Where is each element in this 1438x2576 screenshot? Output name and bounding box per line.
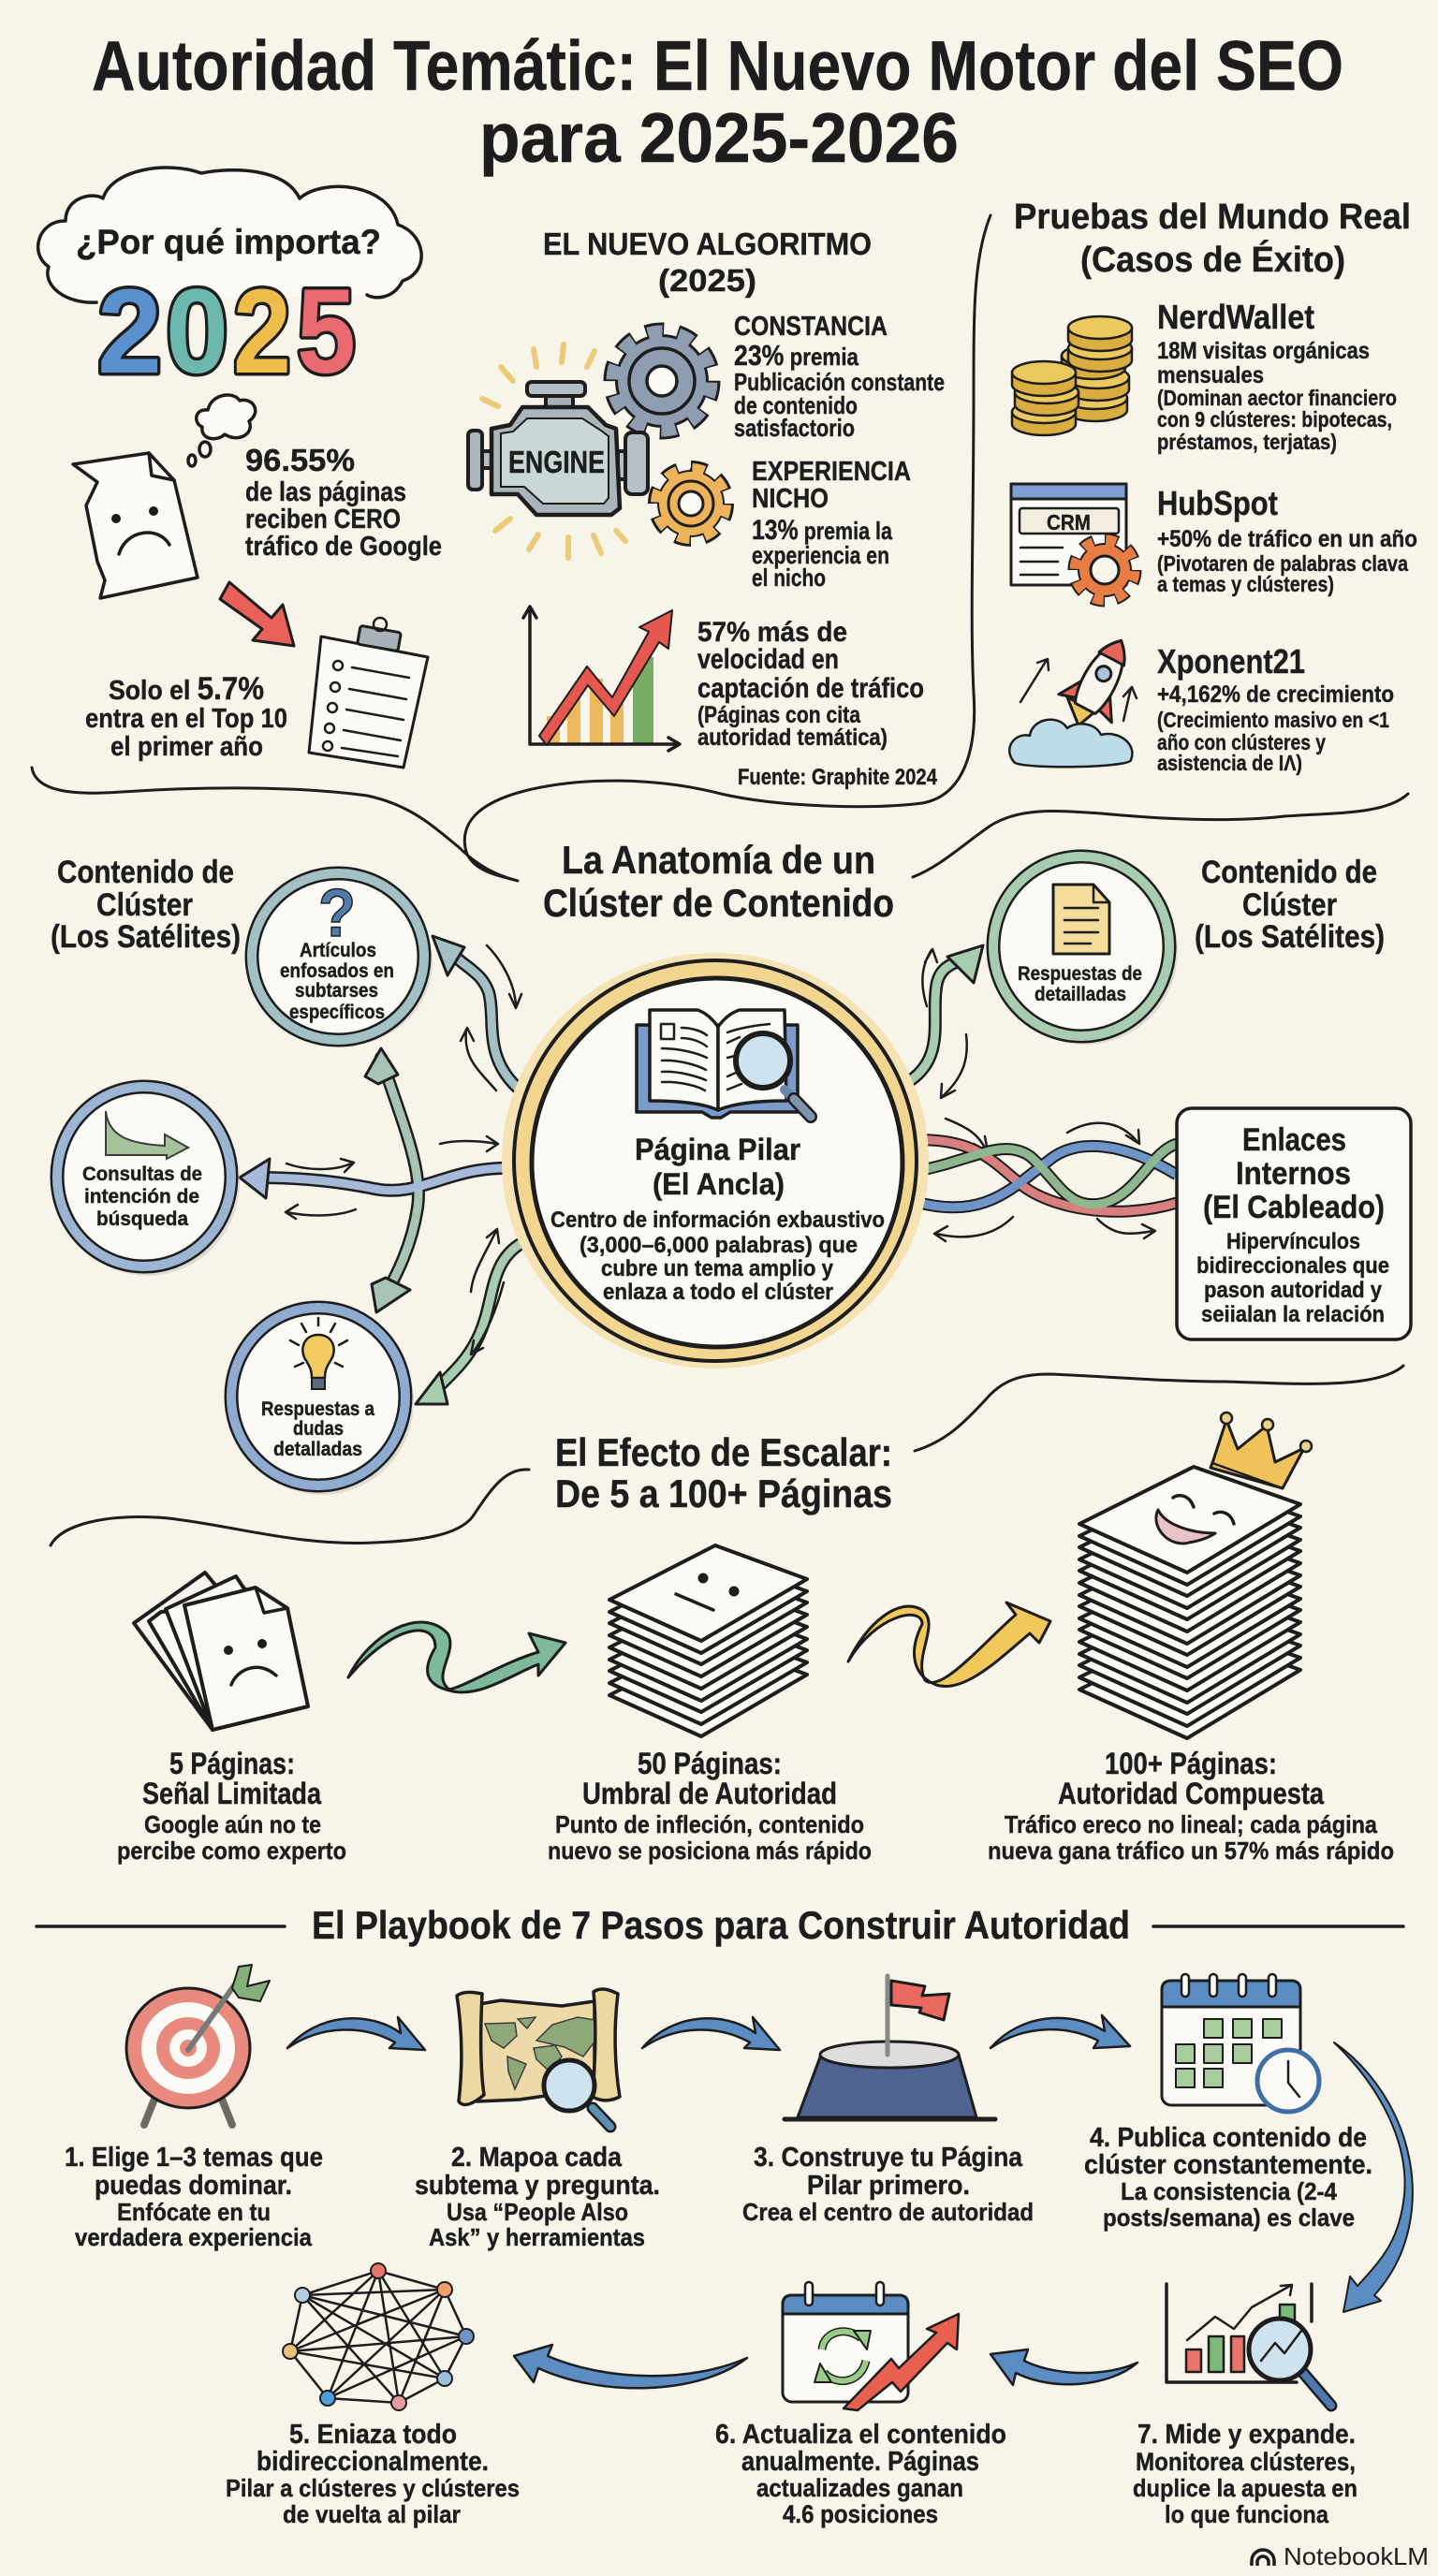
- icon: coins: [1012, 316, 1132, 435]
- arrow: yellow wave: [848, 1603, 1050, 1687]
- text: 50 páginas: 50 Páginas:: [638, 1747, 782, 1780]
- heading: anatomía: Clúster de Contenido: [543, 881, 894, 925]
- text: nerdwallet: 18M visitas orgánicas: [1157, 338, 1370, 364]
- text: posts/semana) es clave: [1103, 2203, 1355, 2232]
- icon: sad document with thought cloud: [73, 395, 256, 598]
- heading: (2025): [658, 263, 756, 298]
- text: 100+ páginas: 100+ Páginas:: [1105, 1747, 1277, 1780]
- arrow: 2 to 3: [642, 2017, 780, 2050]
- icon: document: [1053, 885, 1109, 954]
- text: actualizades ganan: [756, 2474, 963, 2502]
- text: experiencia nicho: [752, 457, 911, 592]
- text: xponent21: (Crecimiento masivo en <1: [1157, 708, 1389, 732]
- heading: EL NUEVO ALGORITMO: [543, 227, 872, 261]
- text: bidireccionalmente.: [257, 2447, 489, 2477]
- text: pillar description: (3,000–6,000 palabras) que: [580, 1233, 858, 1258]
- icon: lightbulb: [290, 1318, 347, 1389]
- panel: pillar page: [502, 953, 929, 1368]
- text: solo 5.7%: [85, 671, 287, 762]
- text: [261, 1398, 374, 1460]
- text: [280, 940, 394, 1023]
- title: [92, 26, 1343, 177]
- big year 2025: 5: [297, 265, 356, 399]
- text: [226, 2420, 520, 2528]
- text: xponent21: asistencia de IΛ): [1157, 751, 1302, 775]
- cloud heading: ¿Por qué importa?: [76, 223, 381, 261]
- text: búsqueda: [96, 1208, 188, 1230]
- text: box title: Enlaces: [1242, 1122, 1346, 1158]
- cloud heading: [38, 168, 421, 302]
- text: nerdwallet: [1157, 298, 1397, 454]
- panel: enlaces internos: [1177, 1108, 1411, 1339]
- text: box title: [1203, 1122, 1385, 1225]
- label: satellites left: Clúster: [96, 887, 193, 923]
- text: 100+ páginas: Tráfico ereco no lineal; cada página: [1005, 1810, 1377, 1838]
- label: satellites right: Clúster: [1242, 887, 1337, 923]
- text: verdadera experiencia: [75, 2223, 312, 2251]
- icon: funnel arrow: [106, 1111, 188, 1159]
- icon: rocket: [1009, 626, 1148, 767]
- step 6: [715, 2282, 1006, 2528]
- icon: calendar with clock: [1162, 1974, 1319, 2112]
- text: xponent21: +4,162% de crecimiento: [1157, 681, 1394, 708]
- panel: pruebas del mundo real: [1009, 198, 1417, 775]
- text: 4.6 posiciones: [783, 2500, 938, 2528]
- label: satellites left: [51, 855, 241, 955]
- text: Monitorea clústeres,: [1136, 2448, 1356, 2476]
- icon: map: [457, 1989, 620, 2127]
- text: constancia: CONSTANCIA: [734, 312, 888, 342]
- arrow: 1 to 2: [287, 2017, 425, 2050]
- text: 5 páginas: percibe como experto: [117, 1837, 346, 1865]
- text: 57%: autoridad temática): [697, 724, 888, 751]
- text: enfosados en: [280, 960, 394, 982]
- step 1: [65, 1965, 323, 2251]
- text: experiencia nicho: EXPERIENCIA: [752, 457, 911, 487]
- text: pillar title: Página Pilar: [635, 1133, 800, 1166]
- text: box description: [1196, 1229, 1389, 1327]
- text: anualmente. Páginas: [741, 2447, 979, 2477]
- text: específicos: [289, 1002, 385, 1023]
- step 7: [1133, 2284, 1357, 2528]
- icon: orange gear: [654, 467, 727, 540]
- text: pillar description: Centro de información exbaustivo: [550, 1208, 885, 1233]
- text: [82, 1164, 202, 1230]
- heading: [543, 227, 872, 298]
- text: subtema y pregunta.: [415, 2171, 660, 2201]
- text: Respuestas de: [1018, 963, 1142, 985]
- big year 2025: 0: [166, 265, 228, 399]
- icon: network: [283, 2263, 474, 2410]
- text: solo 5.7%: entra en el Top 10: [85, 704, 287, 734]
- text: intención de: [84, 1186, 199, 1208]
- text: dudas: [293, 1418, 344, 1440]
- small flow arrows: [286, 945, 1155, 1354]
- text: Ask” y herramientas: [429, 2223, 645, 2251]
- icon: engine: [468, 382, 648, 515]
- text: constancia: de contenido: [734, 391, 858, 419]
- icon: question mark: ?: [318, 876, 356, 951]
- big year 2025: [97, 265, 356, 399]
- text: 100+ páginas: [988, 1747, 1394, 1865]
- text: constancia: satisfactorio: [734, 414, 855, 442]
- icon: open book with magnifier: [637, 1010, 811, 1118]
- text: solo 5.7%: el primer año: [110, 732, 263, 762]
- text: 7. Mide y expande.: [1137, 2420, 1356, 2450]
- text: box title: (El Cableado): [1203, 1190, 1385, 1225]
- text: Consultas de: [82, 1164, 202, 1185]
- heading: anatomía: La Anatomía de un: [562, 838, 875, 882]
- icon: crm window with gear: CRM: [1047, 510, 1091, 534]
- icon: stack of 100 pages with crown: [1079, 1412, 1312, 1738]
- text: 5. Eniaza todo: [289, 2420, 457, 2450]
- text: 57%: 57% más de: [697, 617, 847, 648]
- icon: stack of 50 pages: [609, 1545, 807, 1736]
- source note: Fuente: Graphite 2024: [738, 765, 938, 790]
- arrow: 7 to 6: [990, 2349, 1137, 2385]
- text: constancia: [734, 312, 945, 442]
- text: detalladas: [273, 1439, 362, 1460]
- icon: big gear: [611, 330, 712, 432]
- text: 57%: [697, 617, 924, 751]
- text: [715, 2420, 1006, 2528]
- arrows: cluster connectors: [257, 955, 972, 1395]
- text: 5 páginas: 5 Páginas:: [169, 1747, 295, 1780]
- text: 4. Publica contenido de: [1090, 2123, 1367, 2153]
- text: nerdwallet: mensuales: [1157, 362, 1264, 388]
- text: [415, 2143, 660, 2251]
- text: [65, 2143, 323, 2251]
- panel: satellite detailed answers: [230, 1308, 414, 1495]
- text: Pilar primero.: [807, 2171, 970, 2201]
- text: pillar description: enlaza a todo el clúster: [603, 1280, 833, 1305]
- text: hubspot: HubSpot: [1157, 484, 1278, 522]
- text: hubspot: +50% de tráfico en un año: [1157, 526, 1417, 552]
- heading: Pruebas del Mundo Real: [1014, 198, 1411, 237]
- text: 1. Elige 1–3 temas que: [65, 2143, 323, 2173]
- heading: playbook: El Playbook de 7 Pasos para Construir Autoridad: [312, 1903, 1130, 1947]
- text: [1084, 2123, 1372, 2232]
- text: experiencia nicho: el nicho: [752, 564, 826, 592]
- arrow: green wave: [348, 1622, 565, 1692]
- text: Crea el centro de autoridad: [742, 2198, 1034, 2226]
- text: duplice la apuesta en: [1133, 2474, 1357, 2502]
- text: constancia: Publicación constante: [734, 368, 945, 396]
- step 4: [1084, 1974, 1372, 2232]
- text: [1018, 963, 1142, 1005]
- text: nerdwallet: (Dominan aector financiero: [1157, 386, 1397, 410]
- text: nerdwallet: préstamos, terjatas): [1157, 430, 1337, 454]
- text: xponent21: Xponent21: [1157, 642, 1305, 681]
- arrow: 4 to 7: [1334, 2042, 1413, 2312]
- icon: chart with magnifier: [1167, 2284, 1331, 2406]
- label: satellites right: (Los Satélites): [1195, 919, 1385, 955]
- text: Artículos: [300, 940, 376, 961]
- text: 57%: captación de tráfico: [697, 673, 924, 704]
- text: experiencia nicho: 13% premia la: [752, 515, 892, 546]
- text: 5 páginas: Google aún no te: [144, 1810, 321, 1838]
- arrow: 6 to 5: [514, 2345, 747, 2388]
- text: 5 páginas: [117, 1747, 346, 1865]
- text: box description: bidireccionales que: [1196, 1253, 1389, 1279]
- text: nerdwallet: con 9 clústeres: bipotecas,: [1157, 407, 1392, 432]
- text: box description: seiialan la relación: [1201, 1302, 1385, 1327]
- icon: calendar with refresh and up arrow: [783, 2282, 959, 2410]
- step 3: [742, 1976, 1034, 2226]
- text: pillar title: [635, 1133, 800, 1201]
- heading: (Casos de Éxito): [1080, 239, 1345, 280]
- text: 50 páginas: [548, 1747, 872, 1865]
- icon: pillar with flag: [785, 1976, 995, 2119]
- text: 96.55%: tráfico de Google: [245, 532, 442, 562]
- text: Usa “People Also: [447, 2198, 628, 2226]
- title: para 2025-2026: [479, 98, 959, 177]
- icon: five sad pages: [134, 1573, 308, 1730]
- heading: anatomía: [543, 838, 894, 925]
- icon: target: [126, 1965, 270, 2125]
- text: solo 5.7%: Solo el 5.7%: [109, 671, 264, 707]
- text: Enfócate en tu: [117, 2198, 271, 2226]
- icon: rays: [482, 344, 625, 558]
- text: 50 páginas: nuevo se posiciona más rápido: [548, 1837, 872, 1865]
- text: Respuestas a: [261, 1398, 374, 1420]
- text: 50 páginas: Umbral de Autoridad: [582, 1777, 837, 1810]
- text: La consistencia (2-4: [1121, 2177, 1337, 2205]
- text: experiencia nicho: experiencia en: [752, 541, 889, 569]
- text: pillar title: (El Ancla): [653, 1167, 785, 1201]
- text: xponent21: [1157, 642, 1394, 775]
- big year 2025: 2: [233, 265, 291, 399]
- heading: [1014, 198, 1411, 280]
- text: lo que funciona: [1165, 2500, 1328, 2528]
- text: [1133, 2420, 1357, 2528]
- arrow: 3 to 4: [990, 2015, 1130, 2048]
- step 5: [226, 2263, 520, 2528]
- text: detailladas: [1034, 984, 1126, 1005]
- text: Pilar a clústeres y clústeres: [226, 2474, 520, 2502]
- icon: crm window with gear: [1011, 484, 1135, 600]
- logo: notebooklm: NotebookLM: [1284, 2542, 1429, 2570]
- heading: efecto de escalar: De 5 a 100+ Páginas: [555, 1471, 892, 1515]
- text: 3. Construye tu Página: [754, 2143, 1023, 2173]
- panel: satellite articles: [251, 873, 433, 1046]
- cables: internal links: [913, 1140, 1177, 1211]
- text: 96.55%: reciben CERO: [245, 505, 401, 534]
- chart: growth: [523, 607, 680, 751]
- panel: satellite answers right: [992, 856, 1178, 1045]
- text: subtarses: [295, 980, 378, 1002]
- label: satellites left: (Los Satélites): [51, 919, 241, 955]
- label: satellites right: [1195, 855, 1385, 955]
- text: hubspot: [1157, 484, 1417, 596]
- divider curves middle: [51, 1366, 1403, 1545]
- icon: engine: ENGINE: [508, 445, 605, 479]
- arrowheads: [240, 936, 983, 1404]
- text: 57%: (Páginas con cita: [697, 702, 861, 728]
- text: 2. Mapoa cada: [451, 2143, 623, 2173]
- divider curves top: [32, 215, 1408, 881]
- icon: clipboard: [309, 618, 428, 768]
- text: box description: pason autoridad y: [1204, 1278, 1383, 1303]
- text: 96.55%: de las páginas: [245, 477, 406, 507]
- panel: satellite search intent: [56, 1087, 240, 1276]
- arrow: red down: [220, 582, 294, 646]
- heading: efecto de escalar: El Efecto de Escalar:: [555, 1430, 892, 1474]
- text: puedas dominar.: [95, 2171, 292, 2201]
- text: 100+ páginas: nueva gana tráfico un 57% más rápido: [988, 1837, 1394, 1865]
- heading: efecto de escalar: [555, 1430, 892, 1515]
- text: 57%: velocidad en: [697, 644, 839, 675]
- text: 6. Actualiza el contenido: [715, 2420, 1006, 2450]
- big year 2025: 2: [97, 265, 162, 399]
- text: nerdwallet: NerdWallet: [1157, 298, 1314, 336]
- text: 50 páginas: Punto de infleción, contenido: [555, 1810, 864, 1838]
- label: satellites right: Contenido de: [1201, 855, 1377, 890]
- panel: por qué importa: [38, 168, 442, 768]
- text: box description: Hipervínculos: [1226, 1229, 1360, 1254]
- text: constancia: 23% premia: [734, 339, 858, 372]
- label: satellites left: Contenido de: [57, 855, 234, 890]
- text: de vuelta al pilar: [283, 2500, 461, 2528]
- text: 96.55%: 96.55%: [245, 443, 355, 477]
- text: box title: Internos: [1236, 1156, 1351, 1192]
- text: [742, 2143, 1034, 2226]
- text: 100+ páginas: Autoridad Compuesta: [1058, 1777, 1324, 1810]
- text: pillar description: [550, 1208, 885, 1305]
- text: 96.55%: [245, 443, 442, 562]
- panel: el nuevo algoritmo: [468, 227, 945, 790]
- text: clúster constantemente.: [1084, 2150, 1372, 2180]
- text: hubspot: a temas y clústeres): [1157, 572, 1334, 596]
- text: pillar description: cubre un tema amplio y: [601, 1256, 834, 1281]
- text: xponent21: año con clústeres y: [1157, 730, 1326, 754]
- text: 5 páginas: Señal Limitada: [142, 1777, 321, 1810]
- step 2: [415, 1989, 660, 2251]
- text: experiencia nicho: NICHO: [752, 484, 829, 514]
